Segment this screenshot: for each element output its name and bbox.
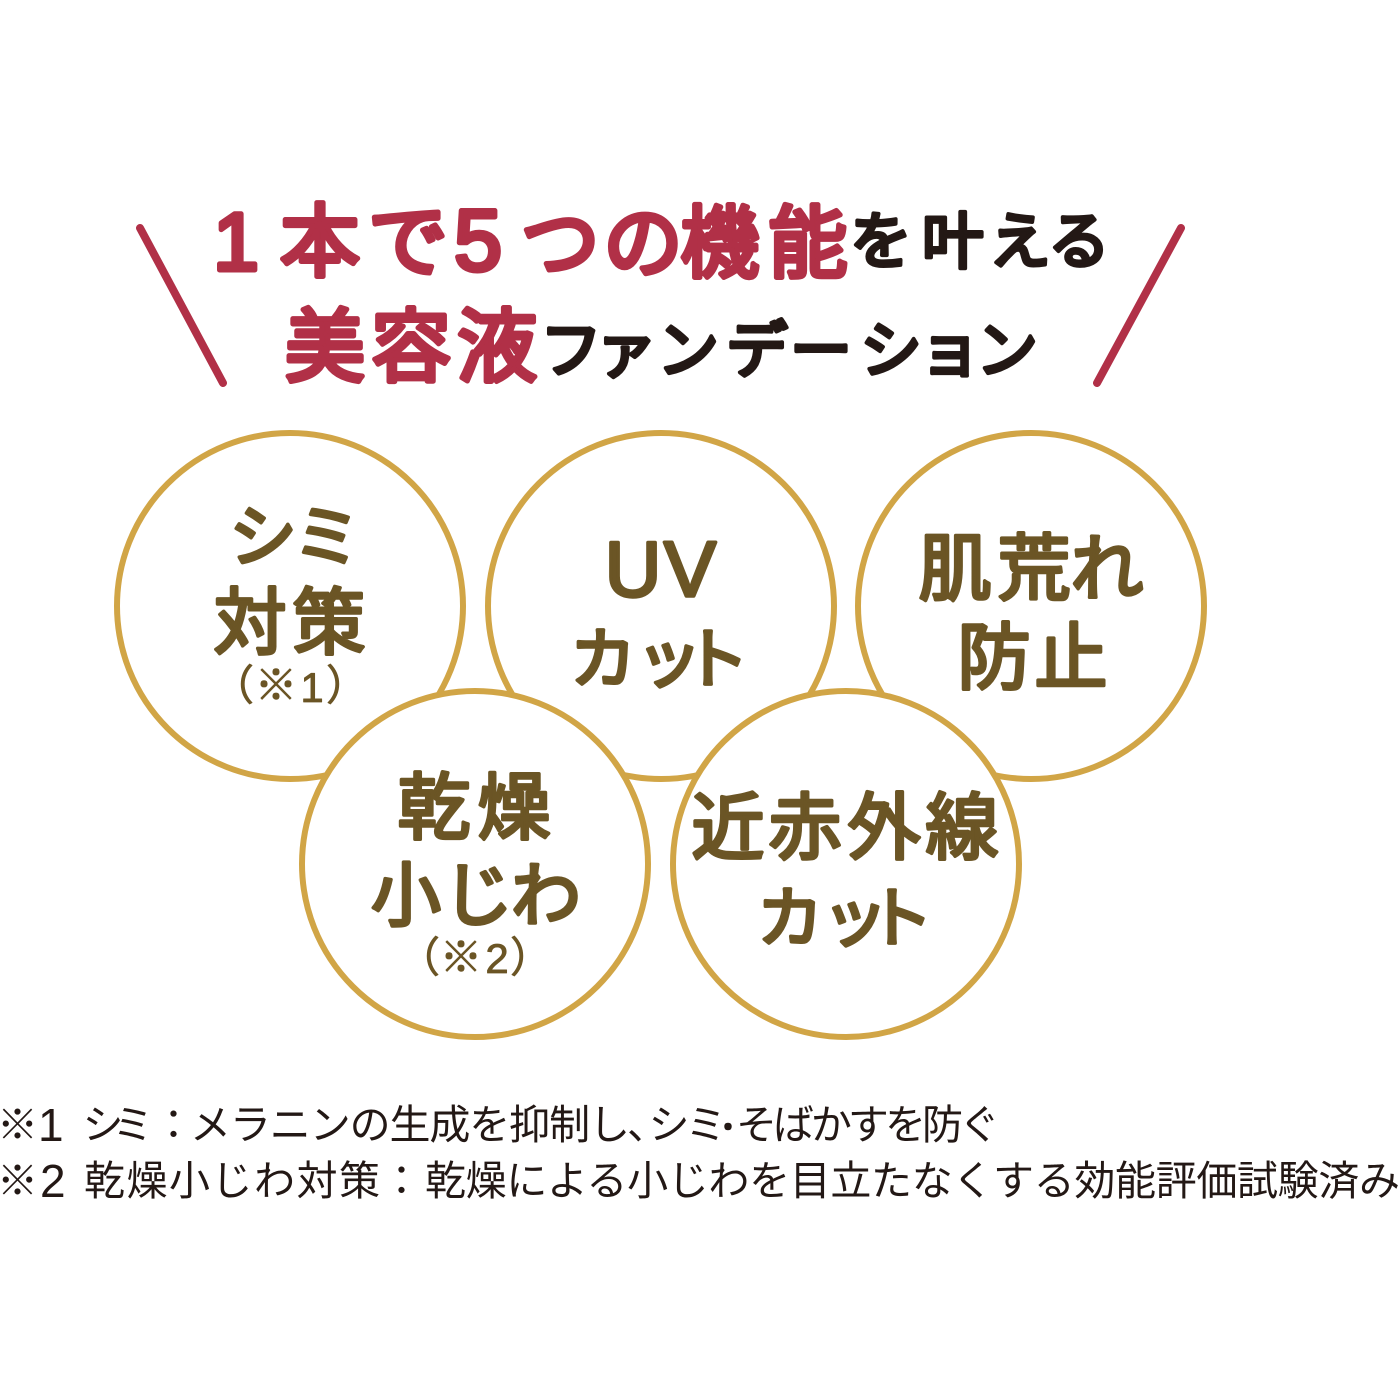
title: を叶える	[850, 208, 1110, 277]
circle: 肌荒れ防止	[858, 433, 1204, 779]
circle: UVカット: カット	[570, 622, 749, 696]
footnotes: シミ	[648, 1102, 726, 1148]
title: つの機能	[520, 199, 848, 288]
title: ファンデーション	[540, 317, 1038, 386]
footnotes: 、	[627, 1102, 668, 1148]
circle: 近赤外線カット: カット	[757, 881, 933, 955]
circle: 乾燥小じわ	[302, 691, 648, 1037]
circle: 乾燥小じわ: ）	[510, 934, 552, 981]
circle: 肌荒れ防止: 肌荒れ	[918, 529, 1144, 610]
footnotes: ：	[153, 1102, 194, 1148]
circle: UVカット: UV	[605, 525, 716, 613]
circle: 近赤外線カット: 近赤外線	[692, 788, 998, 869]
circle: UVカット	[488, 433, 834, 779]
circle: 肌荒れ防止: 防止	[958, 618, 1108, 699]
footnotes	[0, 1099, 1400, 1207]
footnotes: シミ	[82, 1102, 154, 1148]
circle: シミ対策: シミ	[229, 500, 361, 576]
footnotes: ：	[381, 1158, 422, 1204]
title: 5	[454, 193, 502, 289]
circle: シミ対策	[117, 433, 463, 779]
circle: 乾燥小じわ: 乾燥	[398, 768, 550, 849]
circle: 乾燥小じわ: 2	[485, 935, 509, 982]
title: 本で	[280, 198, 448, 287]
footnotes: そばかすを防ぐ	[736, 1102, 1000, 1148]
left slash	[140, 228, 223, 383]
title: 1	[213, 197, 259, 288]
circle: 乾燥小じわ: 小じわ	[371, 857, 581, 935]
footnotes: 1	[38, 1099, 64, 1151]
circle: 近赤外線カット	[673, 691, 1019, 1037]
circle: シミ対策: 1	[300, 664, 324, 711]
circle: シミ対策: （※	[212, 662, 297, 709]
circle: シミ対策: 対策	[214, 583, 366, 664]
circle: 乾燥小じわ: （※	[398, 934, 482, 981]
footnotes: 乾燥小じわ対策	[84, 1158, 380, 1204]
title	[213, 193, 1110, 392]
footnotes: 乾燥による小じわを目立たなくする効能評価試験済み	[425, 1158, 1400, 1204]
footnotes: 2	[40, 1155, 66, 1207]
footnotes: メラニンの生成を抑制し	[190, 1102, 630, 1148]
right slash	[1097, 228, 1181, 383]
circle: シミ対策: ）	[326, 662, 368, 709]
title: 美容液	[285, 303, 537, 392]
footnotes: ・	[714, 1112, 742, 1143]
